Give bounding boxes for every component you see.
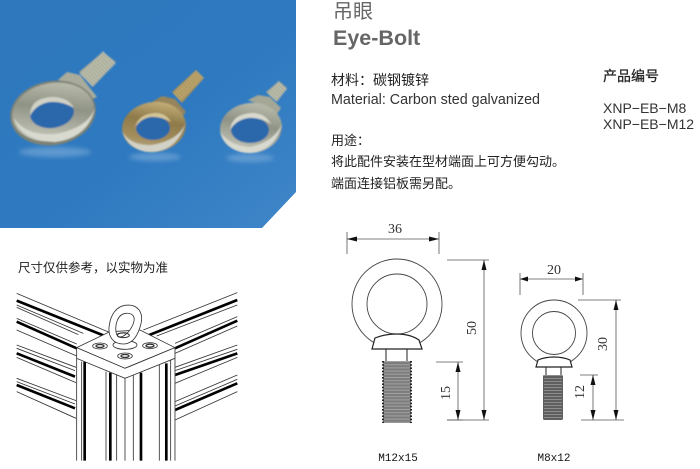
dimension: thread 12: 12 <box>573 385 588 399</box>
technical drawing: M8x12 eye bolt <box>520 263 624 465</box>
text block: material: Material: Carbon sted galvanized <box>331 92 540 108</box>
text block: product codes: XNP−EB−M8 <box>603 100 686 116</box>
text block: usage <box>331 133 565 191</box>
thread <box>543 375 563 420</box>
dimension: thread 15 <box>436 362 463 420</box>
dimension: height 50: 50 <box>465 321 480 335</box>
plate screws <box>93 333 157 359</box>
label: M8x12: M8x12 <box>537 453 571 465</box>
photo: three eye bolts on blue surface <box>0 0 296 228</box>
corner plate <box>77 330 175 378</box>
head and neck <box>536 357 572 376</box>
dimension: thread 15: 15 <box>439 386 454 400</box>
diagram: eye bolt mounted on aluminium profile corner <box>17 293 237 461</box>
title: Chinese: 吊眼 <box>333 1 373 23</box>
ring <box>352 259 442 349</box>
label: M12x15: M12x15 <box>378 453 418 465</box>
head and neck <box>372 334 422 361</box>
note: dimensions for reference only: 尺寸仅供参考，以实物为准 <box>18 260 168 275</box>
eye ring <box>109 305 142 349</box>
bolt: small <box>218 81 287 156</box>
dimension: thread 12 <box>573 375 598 420</box>
bolt: medium brass <box>119 70 204 156</box>
text block: product codes: 产品编号 <box>603 68 659 84</box>
reflections <box>19 147 274 162</box>
dimension: width 36 <box>347 222 439 254</box>
dimension: height 30 <box>578 300 624 420</box>
dimension: width 36: 36 <box>388 222 402 237</box>
bolt: large <box>5 52 116 152</box>
text block: product codes: XNP−EB−M12 <box>603 116 694 132</box>
text block: material <box>331 72 540 108</box>
dimension: width 20: 20 <box>547 263 561 278</box>
dimension: width 20 <box>520 263 583 295</box>
left rails <box>17 293 110 418</box>
vertical column <box>76 358 175 461</box>
dimension: height 50 <box>447 260 489 420</box>
text block: usage: 端面连接铝板需另配。 <box>331 176 461 191</box>
text block: product codes <box>603 68 694 132</box>
dimension: height 30: 30 <box>596 337 611 351</box>
ring <box>521 300 587 366</box>
text block: usage: 将此配件安装在型材端面上可方便勾动。 <box>331 154 565 169</box>
thread <box>383 361 411 423</box>
technical drawing: M12x15 eye bolt <box>347 222 489 465</box>
title: English: Eye-Bolt <box>333 26 420 50</box>
right rails <box>143 293 237 420</box>
text block: usage: 用途： <box>331 133 370 148</box>
text block: material: 材料：碳钢镀锌 <box>331 72 429 88</box>
